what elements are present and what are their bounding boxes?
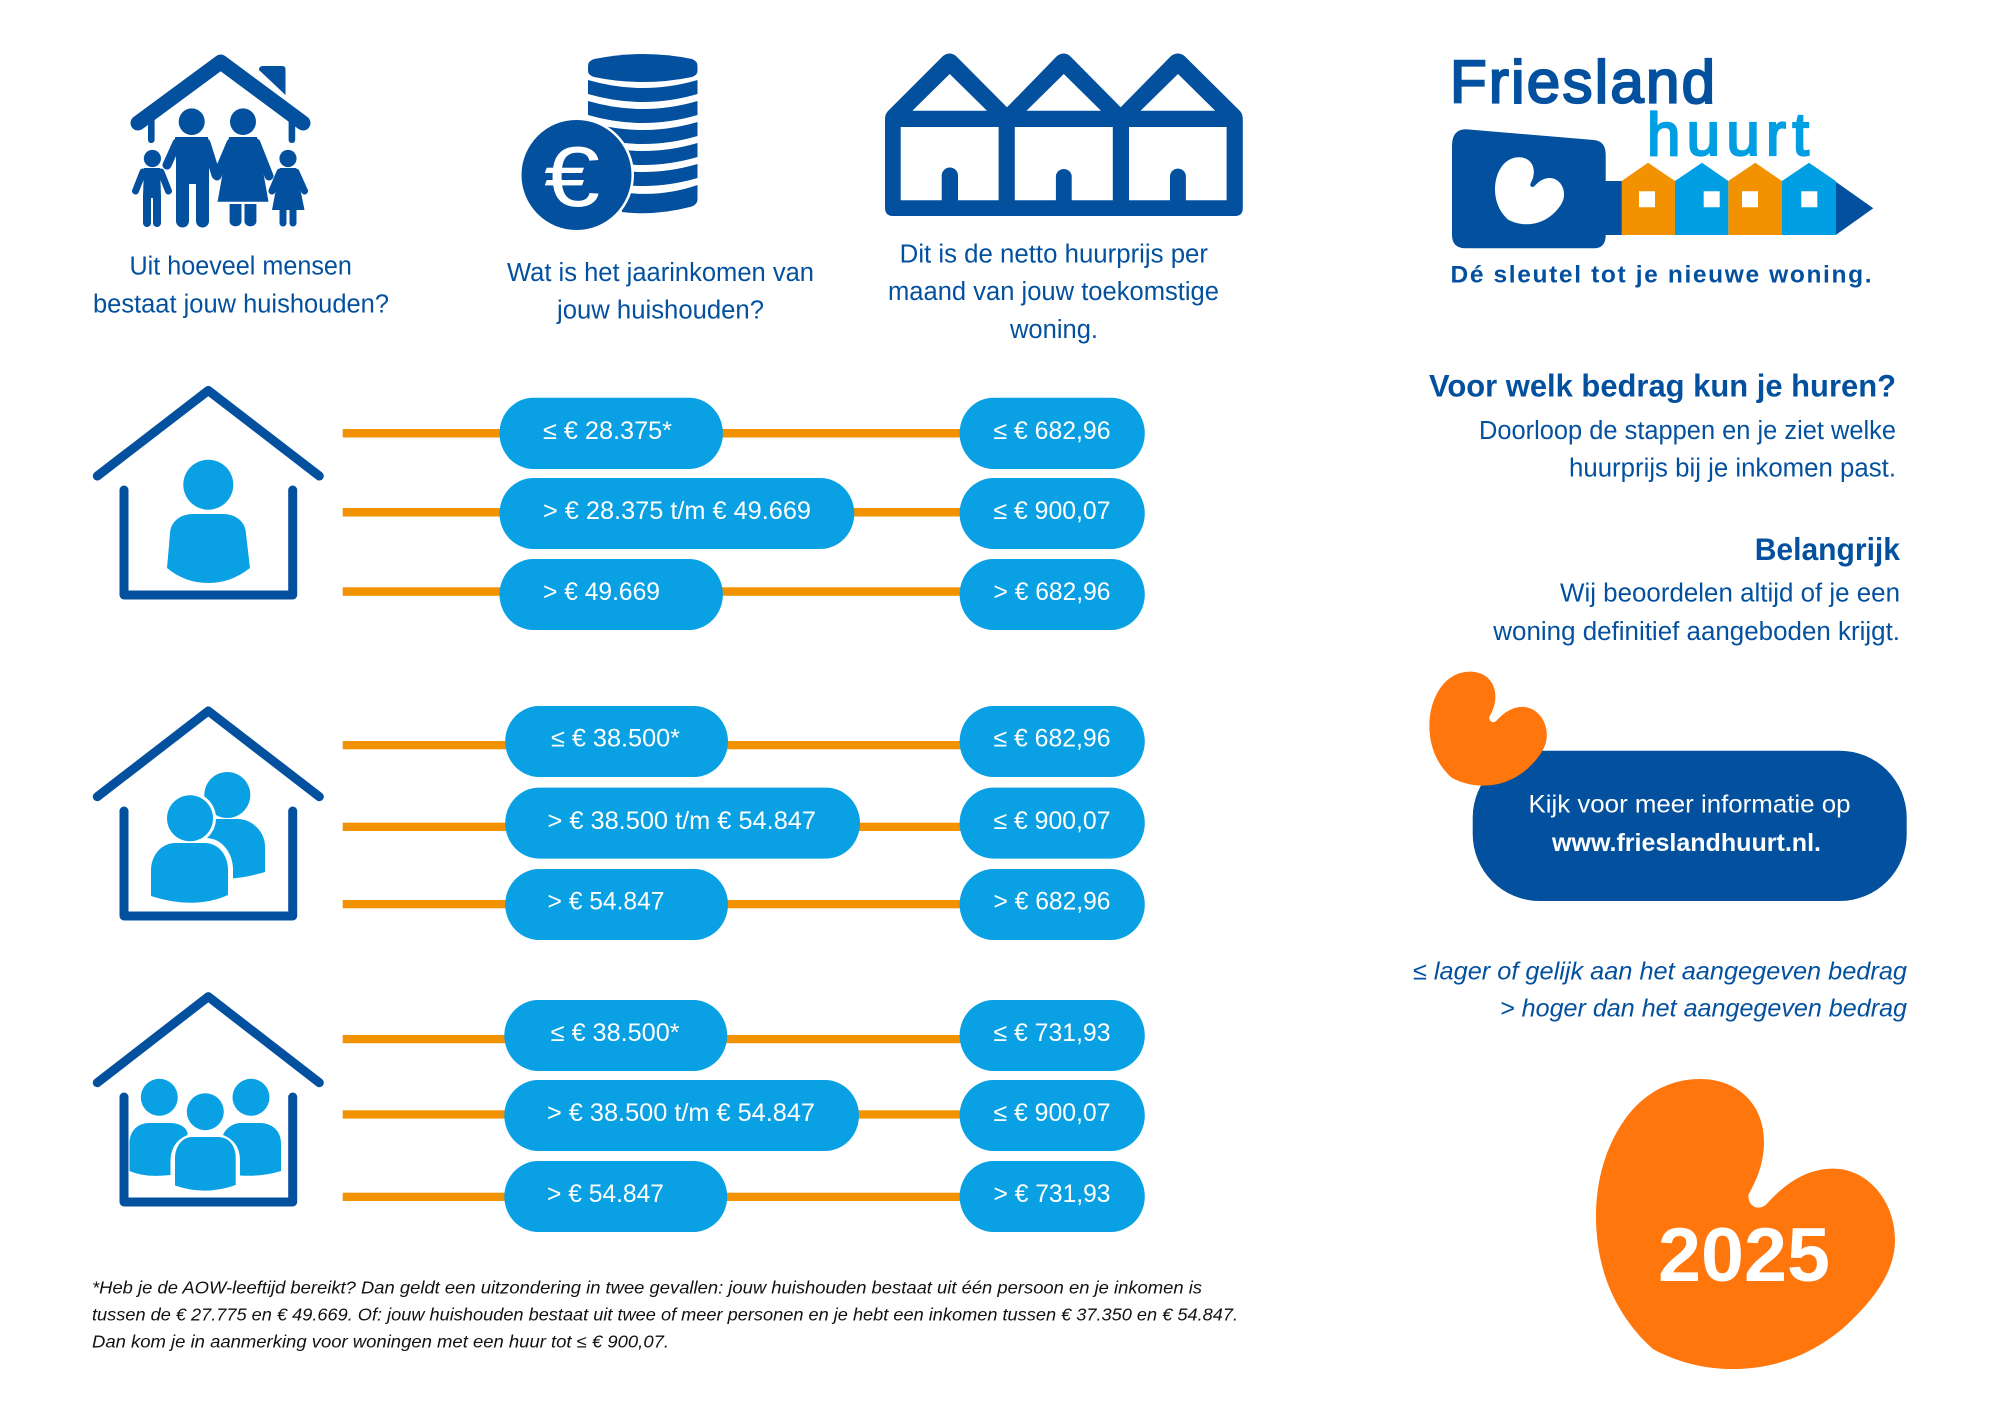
row: income above 49.669 <box>500 559 1145 630</box>
heading: household question: Uit hoeveel mensen <box>130 252 352 280</box>
heading: Voor welk bedrag kun je huren? <box>1429 368 1896 404</box>
row: income up to 38.500: ≤ € 731,93 <box>994 1019 1110 1047</box>
row: income up to 28.375 <box>500 398 1145 469</box>
connector lines <box>343 429 963 596</box>
footnote: *Heb je de AOW-leeftijd bereikt? Dan geldt een uitzondering in twee gevallen: jouw huishouden bestaat uit één persoon en je inkomen is <box>92 1277 1202 1297</box>
body text: Doorloop de stappen en je ziet welke <box>1479 417 1896 445</box>
row: income 38.500 to 54.847 <box>504 1080 1145 1151</box>
row: income 38.500 to 54.847: ≤ € 900,07 <box>994 1099 1110 1127</box>
heading: Belangrijk <box>1755 531 1900 567</box>
body text <box>1479 417 1896 483</box>
heading: rent explanation: maand van jouw toekomstige <box>888 278 1219 306</box>
row: income 28.375 to 49.669: ≤ € 900,07 <box>994 497 1110 525</box>
row: income above 49.669: > € 49.669 <box>543 578 660 606</box>
logo tagline: Dé sleutel tot je nieuwe woning. <box>1450 261 1872 288</box>
panel: household of three or more <box>97 997 1145 1232</box>
icon: house with one person <box>97 390 319 595</box>
text block: important <box>1492 531 1900 646</box>
callout: more information <box>1429 672 1907 901</box>
legend: > hoger dan het aangegeven bedrag <box>1500 994 1907 1022</box>
heading: income question: Wat is het jaarinkomen van <box>507 259 814 287</box>
euro sign: € <box>544 130 600 225</box>
row: income above 54.847: > € 54.847 <box>548 888 664 916</box>
heading: income question: jouw huishouden? <box>556 297 764 325</box>
connector lines <box>343 1035 963 1201</box>
logo: FrieslandHuurt <box>1450 49 1873 288</box>
row: income up to 38.500 <box>505 706 1145 777</box>
row: income up to 38.500: ≤ € 38.500* <box>551 1019 680 1047</box>
heading: rent explanation: woning. <box>1009 316 1098 344</box>
logo key <box>1452 129 1873 248</box>
row: income 38.500 to 54.847: > € 38.500 t/m € 54.847 <box>548 807 816 835</box>
legend <box>1413 958 1907 1022</box>
footnote: Dan kom je in aanmerking voor woningen met een huur tot ≤ € 900,07. <box>92 1332 669 1352</box>
badge: year 2025: 2025 <box>1658 1213 1830 1298</box>
heading: rent explanation: Dit is de netto huurprijs per <box>900 241 1209 269</box>
row: income above 54.847 <box>505 869 1145 940</box>
badge: year 2025 <box>1596 1079 1895 1369</box>
icon: house with three people <box>97 997 319 1202</box>
row: income up to 28.375: ≤ € 28.375* <box>543 417 672 445</box>
callout: more information: Kijk voor meer informatie op <box>1528 791 1850 819</box>
row: income up to 38.500: ≤ € 682,96 <box>994 724 1110 752</box>
footnote <box>92 1277 1238 1352</box>
icon: family under roof <box>136 62 304 228</box>
icon: coins with euro <box>519 54 698 232</box>
panel: one-person household <box>97 390 1145 630</box>
row: income above 49.669: > € 682,96 <box>994 578 1110 606</box>
heading: household question: bestaat jouw huishouden? <box>93 290 389 318</box>
text block: for which amount can you rent <box>1429 368 1896 483</box>
icon: house with two people <box>97 711 319 916</box>
heading: income question <box>507 259 814 325</box>
heading: rent explanation <box>888 241 1219 344</box>
logo wordmark huurt: huurt <box>1647 101 1809 168</box>
row: income above 54.847: > € 731,93 <box>994 1180 1110 1208</box>
legend: ≤ lager of gelijk aan het aangegeven bedrag <box>1413 958 1907 986</box>
icon: orange bean <box>1429 672 1547 786</box>
row: income above 54.847: > € 54.847 <box>547 1180 664 1208</box>
row: income up to 38.500: ≤ € 38.500* <box>551 724 680 752</box>
heading: household question <box>93 252 389 318</box>
panel: two-person household <box>97 706 1145 940</box>
body text: woning definitief aangeboden krijgt. <box>1492 618 1900 646</box>
row: income 38.500 to 54.847: ≤ € 900,07 <box>994 807 1110 835</box>
callout: more information: www.frieslandhuurt.nl. <box>1551 829 1821 857</box>
row: income 38.500 to 54.847 <box>505 788 1145 859</box>
connector lines <box>343 741 963 908</box>
row: income 28.375 to 49.669 <box>500 478 1145 549</box>
footnote: tussen de € 27.775 en € 49.669. Of: jouw huishouden bestaat uit twee of meer personen en je hebt een inkomen tussen € 37.350 en € 54.847. <box>92 1305 1238 1325</box>
row: income up to 38.500 <box>504 1000 1145 1071</box>
logo wordmark Friesland: Friesland <box>1450 49 1715 116</box>
row: income up to 28.375: ≤ € 682,96 <box>994 417 1110 445</box>
row: income above 54.847 <box>504 1161 1145 1232</box>
row: income 38.500 to 54.847: > € 38.500 t/m € 54.847 <box>547 1099 815 1127</box>
row: income above 54.847: > € 682,96 <box>994 888 1110 916</box>
icon: row of three houses <box>885 54 1243 216</box>
body text: huurprijs bij je inkomen past. <box>1569 455 1896 483</box>
body text: Wij beoordelen altijd of je een <box>1560 580 1900 608</box>
body text <box>1492 580 1900 646</box>
row: income 28.375 to 49.669: > € 28.375 t/m € 49.669 <box>543 497 811 525</box>
